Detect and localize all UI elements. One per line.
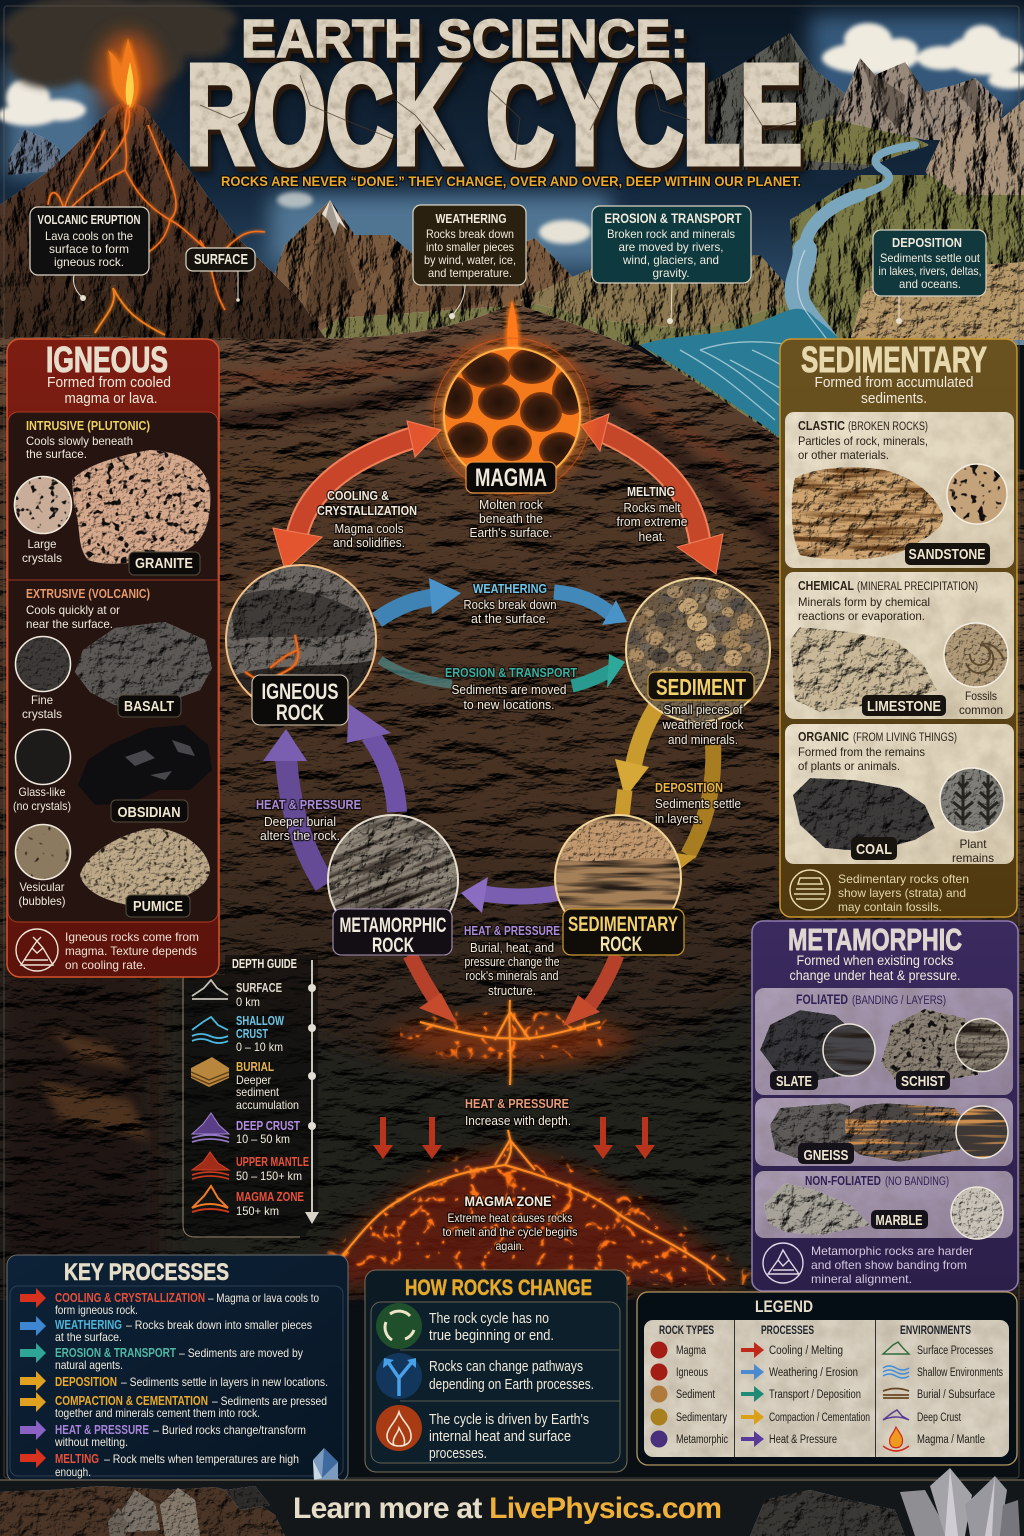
swatch: large crystals bbox=[14, 476, 72, 565]
footer band bbox=[0, 1468, 1024, 1536]
depth: shallow crust: CRUST bbox=[236, 1027, 268, 1041]
rock: sandstone: SANDSTONE bbox=[908, 546, 986, 563]
text: deposition: Sediments settle bbox=[655, 797, 741, 811]
process: heat and pressure: without melting. bbox=[54, 1435, 128, 1449]
process: compaction and cementation: together and minerals cement them into rock. bbox=[55, 1406, 260, 1420]
depth: surface: SURFACE bbox=[236, 981, 282, 995]
process: melting: – Rock melts when temperatures are high bbox=[104, 1452, 299, 1466]
depth: upper mantle: 50 – 150+ km bbox=[236, 1169, 302, 1183]
panel: key processes bbox=[7, 1255, 348, 1482]
swatch: fine crystals: Fine bbox=[31, 693, 53, 707]
callout: deposition: in lakes, rivers, deltas, bbox=[878, 264, 982, 278]
swatch: large crystals: Large bbox=[28, 537, 57, 551]
rock: limestone bbox=[790, 623, 1008, 717]
process: erosion and transport: EROSION & TRANSPORT bbox=[55, 1345, 176, 1360]
process: cooling and crystallization: – Magma or lava cools to bbox=[208, 1291, 319, 1305]
text: sediment description: weathered rock bbox=[662, 718, 744, 732]
card: clastic: CLASTIC bbox=[798, 418, 845, 433]
legend column: rock types: Sediment bbox=[676, 1389, 716, 1401]
process: melting bbox=[20, 1448, 299, 1479]
text: heat and pressure increase bbox=[465, 1096, 571, 1128]
depth: surface: 0 km bbox=[236, 995, 260, 1009]
text: magma zone: MAGMA ZONE bbox=[464, 1193, 552, 1209]
text: metamorphic definition: change under heat & pressure. bbox=[790, 968, 960, 983]
text: erosion and transport: Sediments are moved bbox=[452, 683, 567, 697]
node: sedimentary rock bbox=[548, 808, 690, 956]
depth: upper mantle bbox=[192, 1152, 309, 1183]
legend column: processes: Heat & Pressure bbox=[769, 1434, 837, 1446]
background art: river and sea bbox=[640, 145, 915, 455]
card: foliated: FOLIATED bbox=[796, 992, 848, 1007]
label: sediment: SEDIMENT bbox=[656, 674, 746, 700]
process: deposition: – Sediments settle in layers in new locations. bbox=[121, 1375, 328, 1389]
text: sedimentary definition: sediments. bbox=[861, 390, 927, 407]
rock: marble: MARBLE bbox=[876, 1212, 922, 1229]
callout: weathering: into smaller pieces bbox=[426, 240, 514, 254]
text: cooling and crystallization: COOLING & bbox=[327, 489, 389, 503]
rock: marble bbox=[764, 1183, 1003, 1239]
card: chemical: Minerals form by chemical bbox=[798, 595, 930, 609]
rock: obsidian bbox=[78, 725, 212, 822]
card: non-foliated: (NO BANDING) bbox=[885, 1176, 949, 1188]
callout: deposition: and oceans. bbox=[899, 277, 961, 291]
point: change pathways: Rocks can change pathways bbox=[429, 1358, 583, 1375]
depth: burial: sediment bbox=[236, 1085, 280, 1099]
legend column: processes: PROCESSES bbox=[761, 1325, 814, 1337]
legend column: environments: Surface Processes bbox=[917, 1345, 993, 1357]
process: erosion and transport: natural agents. bbox=[55, 1358, 123, 1372]
text: cooling and crystallization: Magma cools bbox=[334, 522, 404, 536]
text: igneous note: Igneous rocks come from bbox=[65, 930, 199, 944]
text: heat and pressure, metamorphic to igneous: Deeper burial bbox=[264, 815, 336, 829]
card: foliated: (BANDING / LAYERS) bbox=[852, 995, 946, 1007]
text: heat and pressure increase: Increase with depth. bbox=[465, 1114, 571, 1128]
node: metamorphic rock bbox=[327, 814, 459, 956]
label: sedimentary rock: SEDIMENTARY bbox=[568, 913, 678, 936]
text: heat and pressure, metamorphic to igneous: HEAT & PRESSURE bbox=[256, 798, 361, 812]
point: no beginning: The rock cycle has no bbox=[429, 1310, 549, 1327]
text: metamorphic definition bbox=[790, 953, 960, 983]
arrow: sedimentary to metamorphic bbox=[461, 877, 558, 913]
depth: magma zone bbox=[192, 1186, 304, 1218]
rock: slate bbox=[760, 1010, 875, 1090]
callout: deposition bbox=[873, 230, 986, 324]
process: cooling and crystallization: COOLING & CRYSTALLIZATION bbox=[55, 1290, 205, 1305]
text: igneous definition: magma or lava. bbox=[64, 390, 158, 407]
text: melting bbox=[616, 485, 688, 544]
callout: deposition: DEPOSITION bbox=[892, 235, 962, 250]
swatch: vesicular bbox=[15, 824, 71, 908]
text: igneous note: on cooling rate. bbox=[65, 958, 146, 972]
callout: weathering: by wind, water, ice, bbox=[424, 253, 516, 267]
legend column: processes: Cooling / Melting bbox=[769, 1345, 843, 1357]
background: sky bbox=[0, 0, 1024, 345]
rock: schist: SCHIST bbox=[901, 1073, 945, 1090]
label: sedimentary rock: ROCK bbox=[600, 933, 642, 956]
section: extrusive: near the surface. bbox=[26, 617, 113, 631]
text: magma description: Earth's surface. bbox=[470, 526, 552, 540]
callout: deposition: Sediments settle out bbox=[880, 251, 981, 265]
card: clastic: Particles of rock, minerals, bbox=[798, 434, 928, 448]
depth: magma zone: MAGMA ZONE bbox=[236, 1190, 304, 1204]
label: igneous rock: IGNEOUS bbox=[262, 679, 338, 704]
section: extrusive: EXTRUSIVE (VOLCANIC) bbox=[26, 587, 150, 601]
legend column: environments: Deep Crust bbox=[917, 1412, 962, 1424]
process: compaction and cementation: – Sediments are pressed bbox=[212, 1394, 327, 1408]
process: cooling and crystallization bbox=[20, 1288, 319, 1317]
text: igneous definition: Formed from cooled bbox=[47, 374, 171, 391]
heading: key processes: KEY PROCESSES bbox=[64, 1259, 229, 1286]
rock: coal bbox=[793, 768, 1004, 865]
panel: how rocks change bbox=[365, 1270, 627, 1472]
process: weathering: WEATHERING bbox=[55, 1317, 122, 1332]
card: chemical: reactions or evaporation. bbox=[798, 609, 925, 623]
card: non-foliated bbox=[755, 1171, 1013, 1239]
icon: blue crystal bbox=[308, 1448, 343, 1482]
text: metamorphic definition: Formed when existing rocks bbox=[796, 953, 954, 968]
text: weathering: at the surface. bbox=[471, 612, 549, 626]
depth: burial bbox=[191, 1057, 299, 1112]
card: gneiss bbox=[755, 1098, 1013, 1166]
depth: deep crust bbox=[192, 1113, 300, 1146]
point: heat driven: internal heat and surface bbox=[429, 1428, 571, 1445]
point: heat driven bbox=[376, 1405, 589, 1462]
legend column: processes: Weathering / Erosion bbox=[769, 1367, 858, 1379]
card: chemical: (MINERAL PRECIPITATION) bbox=[857, 581, 978, 593]
arrow: erosion and transport bbox=[380, 654, 625, 688]
text: metamorphic note: Metamorphic rocks are harder bbox=[811, 1244, 973, 1258]
callout: surface: SURFACE bbox=[194, 252, 248, 268]
legend column: rock types: ROCK TYPES bbox=[659, 1325, 714, 1337]
swatch: vesicular: (bubbles) bbox=[18, 894, 66, 908]
callout: erosion and transport: wind, glaciers, and bbox=[622, 253, 719, 267]
card: organic: ORGANIC bbox=[798, 729, 850, 744]
background art: left clouds and volcano bbox=[0, 0, 330, 345]
label: metamorphic rock: METAMORPHIC bbox=[340, 914, 446, 937]
section: intrusive: INTRUSIVE (PLUTONIC) bbox=[26, 419, 150, 433]
panel: metamorphic bbox=[752, 921, 1018, 1291]
heading: Earth Science: EARTH SCIENCE: bbox=[241, 9, 688, 69]
process: deposition: DEPOSITION bbox=[55, 1374, 117, 1389]
rock: pumice: PUMICE bbox=[133, 898, 183, 915]
text: magma zone: Extreme heat causes rocks bbox=[448, 1211, 572, 1225]
text: heat and pressure, sedimentary to metamorphic: structure. bbox=[488, 984, 536, 998]
rock: granite: GRANITE bbox=[135, 555, 193, 572]
swatch: vesicular: Vesicular bbox=[20, 880, 64, 894]
depth: burial: accumulation bbox=[236, 1098, 299, 1112]
text: metamorphic note: and often show banding from bbox=[811, 1258, 967, 1272]
rock: slate: SLATE bbox=[776, 1073, 812, 1090]
node: magma bbox=[424, 328, 600, 504]
depth: deep crust: DEEP CRUST bbox=[236, 1119, 300, 1133]
label: igneous rock: ROCK bbox=[276, 700, 324, 725]
depth: upper mantle: UPPER MANTLE bbox=[236, 1155, 309, 1169]
footer text: Learn more at LivePhysics.com bbox=[293, 1492, 722, 1525]
depth: deep crust: 10 – 50 km bbox=[236, 1132, 290, 1146]
text: melting: MELTING bbox=[627, 485, 675, 499]
callout: volcanic eruption bbox=[30, 207, 149, 301]
callout: weathering: WEATHERING bbox=[436, 211, 506, 226]
heading: legend: LEGEND bbox=[755, 1297, 813, 1316]
depth: burial: BURIAL bbox=[236, 1060, 274, 1074]
callout: volcanic eruption: igneous rock. bbox=[54, 255, 124, 269]
arrow: cooling and crystallization bbox=[273, 421, 441, 570]
callout: surface bbox=[186, 248, 255, 302]
text: metamorphic note bbox=[811, 1244, 973, 1286]
text: igneous note: magma. Texture depends bbox=[65, 944, 197, 958]
rock: pumice bbox=[80, 828, 210, 917]
text: melting: Rocks melt bbox=[624, 501, 681, 515]
card: chemical: CHEMICAL bbox=[798, 578, 854, 593]
text: magma zone: to melt and the cycle begins bbox=[442, 1225, 578, 1239]
section: intrusive: Cools slowly beneath bbox=[26, 434, 133, 448]
text: heat and pressure, metamorphic to igneous: alters the rock. bbox=[260, 829, 340, 843]
arrows: down into magma bbox=[410, 955, 617, 1026]
section: intrusive bbox=[14, 419, 210, 575]
depth: surface bbox=[192, 980, 282, 1009]
text: metamorphic note: mineral alignment. bbox=[811, 1272, 912, 1286]
legend column: processes: Transport / Deposition bbox=[769, 1389, 861, 1401]
panel: sedimentary bbox=[780, 339, 1017, 917]
rock: limestone: LIMESTONE bbox=[867, 698, 941, 715]
card: clastic bbox=[785, 412, 1014, 568]
point: heat driven: processes. bbox=[429, 1445, 487, 1462]
subtitle: ROCKS ARE NEVER “DONE.” THEY CHANGE, OVER AND OVER, DEEP WITHIN OUR PLANET. bbox=[221, 174, 801, 189]
text: sedimentary note: show layers (strata) and bbox=[838, 886, 966, 900]
arrow: weathering bbox=[377, 578, 627, 625]
label: magma: MAGMA bbox=[475, 464, 547, 492]
rock: granite bbox=[72, 450, 210, 575]
callout: weathering: Rocks break down bbox=[426, 227, 514, 241]
text: cooling and crystallization bbox=[317, 489, 417, 550]
process: melting: MELTING bbox=[55, 1451, 99, 1466]
point: change pathways: depending on Earth processes. bbox=[429, 1376, 594, 1393]
text: magma zone bbox=[442, 1193, 578, 1253]
legend column: environments: Burial / Subsurface bbox=[917, 1389, 995, 1401]
panel: depth guide bbox=[183, 955, 319, 1237]
section: intrusive: the surface. bbox=[26, 447, 87, 461]
card: clastic: (BROKEN ROCKS) bbox=[848, 421, 928, 433]
label: metamorphic rock: ROCK bbox=[372, 934, 414, 957]
rock: basalt: BASALT bbox=[124, 698, 174, 715]
callout: erosion and transport: Broken rock and minerals bbox=[607, 227, 735, 241]
text: sedimentary note: Sedimentary rocks often bbox=[838, 872, 969, 886]
arrow: sediment to sedimentary bbox=[615, 702, 660, 816]
legend column: environments: Magma / Mantle bbox=[917, 1434, 985, 1446]
rock: basalt bbox=[75, 622, 212, 717]
text: sediment description bbox=[662, 703, 744, 747]
callout: volcanic eruption: VOLCANIC ERUPTION bbox=[38, 213, 140, 227]
label: igneous rock bbox=[252, 675, 348, 725]
text: heat and pressure increase: HEAT & PRESSURE bbox=[465, 1096, 569, 1111]
legend column: rock types: Igneous bbox=[676, 1367, 708, 1379]
arrow: deposition bbox=[668, 745, 713, 870]
depth: burial: Deeper bbox=[236, 1073, 271, 1087]
process: compaction and cementation bbox=[20, 1392, 327, 1420]
text: heat and pressure, sedimentary to metamorphic: HEAT & PRESSURE bbox=[464, 924, 560, 938]
node: igneous rock bbox=[217, 556, 385, 725]
process: compaction and cementation: COMPACTION & CEMENTATION bbox=[55, 1393, 208, 1408]
swatch: glass-like: (no crystals) bbox=[13, 799, 71, 813]
card: non-foliated: NON-FOLIATED bbox=[805, 1173, 881, 1188]
footer rocks: left bbox=[0, 1486, 285, 1536]
text: erosion and transport bbox=[445, 665, 577, 712]
rock: coal: Plant bbox=[960, 837, 987, 851]
background art: right mountains and clouds bbox=[680, 15, 1024, 340]
card: chemical bbox=[785, 572, 1014, 719]
text: heat and pressure, sedimentary to metamorphic bbox=[464, 924, 560, 998]
icon: volcano badge bbox=[16, 929, 58, 971]
text: magma description: beneath the bbox=[479, 512, 543, 526]
process: deposition bbox=[20, 1371, 328, 1391]
depth: shallow crust: SHALLOW bbox=[236, 1014, 284, 1028]
text: sedimentary note: may contain fossils. bbox=[838, 900, 942, 914]
point: change pathways bbox=[376, 1353, 594, 1399]
rock: coal: remains bbox=[952, 851, 994, 865]
text: igneous definition bbox=[47, 374, 171, 407]
callout: erosion and transport: gravity. bbox=[652, 266, 690, 280]
legend column: processes: Compaction / Cementation bbox=[769, 1412, 870, 1424]
rock: limestone: common bbox=[959, 703, 1003, 717]
text: melting: heat. bbox=[638, 530, 666, 544]
process: cooling and crystallization: form igneous rock. bbox=[55, 1303, 138, 1317]
swatch: large crystals: crystals bbox=[22, 551, 62, 565]
text: cooling and crystallization: and solidifies. bbox=[333, 536, 405, 550]
timeline bbox=[305, 960, 319, 1224]
legend column: processes bbox=[741, 1325, 870, 1447]
heading: how rocks change: HOW ROCKS CHANGE bbox=[405, 1275, 592, 1300]
legend column: rock types: Metamorphic bbox=[676, 1434, 728, 1446]
arrow: melting bbox=[581, 414, 723, 574]
label: sedimentary rock bbox=[563, 909, 684, 956]
rock: gneiss bbox=[770, 1103, 1008, 1164]
text: heat and pressure, sedimentary to metamorphic: pressure change the bbox=[464, 955, 560, 969]
card: foliated bbox=[755, 988, 1013, 1095]
card: organic bbox=[785, 724, 1014, 865]
rock: limestone: Fossils bbox=[965, 689, 997, 703]
process: weathering: at the surface. bbox=[55, 1330, 122, 1344]
callout: volcanic eruption: Lava cools on the bbox=[45, 229, 133, 243]
arrow: metamorphic to igneous bbox=[263, 704, 397, 885]
callout: erosion and transport bbox=[592, 206, 751, 324]
process: heat and pressure: HEAT & PRESSURE bbox=[55, 1422, 149, 1437]
process: melting: enough. bbox=[55, 1465, 91, 1479]
text: cooling and crystallization: CRYSTALLIZATION bbox=[317, 504, 417, 518]
text: weathering bbox=[464, 581, 557, 626]
background art: centre mountains and clouds bbox=[250, 192, 860, 460]
text: sedimentary definition: Formed from accumulated bbox=[814, 374, 974, 391]
swatch: fine crystals: crystals bbox=[22, 707, 62, 721]
callout: erosion and transport: are moved by rivers, bbox=[618, 240, 724, 254]
text: heat and pressure, sedimentary to metamorphic: rock's minerals and bbox=[466, 969, 559, 983]
depth: shallow crust: 0 – 10 km bbox=[236, 1040, 283, 1054]
panel: legend bbox=[637, 1292, 1017, 1465]
text: sediment description: Small pieces of bbox=[664, 703, 743, 717]
text: sedimentary definition bbox=[814, 374, 974, 407]
process: heat and pressure bbox=[20, 1420, 306, 1449]
process: erosion and transport bbox=[20, 1343, 303, 1372]
background: lava vents and magma zone bbox=[300, 300, 760, 1285]
callout: weathering bbox=[413, 205, 526, 319]
point: no beginning: true beginning or end. bbox=[429, 1327, 554, 1344]
legend column: rock types bbox=[650, 1325, 728, 1448]
rock: obsidian: OBSIDIAN bbox=[118, 804, 180, 821]
arrows: increasing depth bbox=[373, 1117, 655, 1159]
process: erosion and transport: – Sediments are moved by bbox=[179, 1346, 303, 1360]
rock: sandstone bbox=[792, 464, 1007, 565]
text: erosion and transport: to new locations. bbox=[464, 698, 554, 712]
text: magma description bbox=[470, 498, 552, 540]
section: extrusive: Cools quickly at or bbox=[26, 603, 120, 617]
label: metamorphic rock bbox=[333, 909, 452, 957]
text: melting: from extreme bbox=[616, 515, 688, 529]
rock: gneiss: GNEISS bbox=[804, 1147, 848, 1164]
heading: igneous: IGNEOUS bbox=[46, 339, 168, 380]
node: sediment bbox=[622, 574, 774, 723]
process: weathering: – Rocks break down into smaller pieces bbox=[126, 1318, 312, 1332]
panel: igneous bbox=[7, 339, 219, 977]
rock: schist bbox=[881, 1009, 1009, 1090]
text: weathering: WEATHERING bbox=[473, 581, 547, 596]
background: underground rock layers bbox=[0, 303, 1024, 1300]
swatch: fine crystals bbox=[15, 636, 71, 721]
point: no beginning bbox=[376, 1303, 554, 1349]
text: heat and pressure, metamorphic to igneous bbox=[256, 798, 361, 843]
callout: volcanic eruption: surface to form bbox=[49, 242, 129, 256]
footer rocks: right crystals bbox=[750, 1468, 1020, 1536]
text: deposition: DEPOSITION bbox=[655, 781, 723, 795]
text: magma zone: again. bbox=[496, 1239, 524, 1253]
card: clastic: or other materials. bbox=[798, 448, 889, 462]
text: sediment description: and minerals. bbox=[668, 733, 738, 747]
legend column: rock types: Magma bbox=[676, 1345, 706, 1357]
depth: shallow crust bbox=[192, 1014, 284, 1054]
legend column: rock types: Sedimentary bbox=[676, 1412, 727, 1424]
arrows: cycle between rock types bbox=[263, 414, 723, 1026]
text: weathering: Rocks break down bbox=[464, 598, 557, 612]
label: magma bbox=[466, 462, 556, 493]
text: igneous note bbox=[65, 930, 199, 972]
text: magma description: Molten rock bbox=[479, 498, 544, 512]
swatch: glass-like: Glass-like bbox=[18, 785, 66, 799]
callout: weathering: and temperature. bbox=[428, 266, 512, 280]
text: heat and pressure, sedimentary to metamorphic: Burial, heat, and bbox=[470, 941, 554, 955]
swatch: glass-like bbox=[13, 730, 71, 813]
card: organic: of plants or animals. bbox=[798, 759, 900, 773]
process: weathering bbox=[20, 1316, 312, 1344]
legend column: environments bbox=[883, 1325, 1003, 1451]
text: deposition: in layers. bbox=[655, 812, 702, 826]
rock: coal: COAL bbox=[856, 841, 892, 858]
depth: magma zone: 150+ km bbox=[236, 1204, 279, 1218]
card: organic: (FROM LIVING THINGS) bbox=[853, 732, 957, 744]
text: sedimentary note bbox=[838, 872, 969, 914]
process: heat and pressure: – Buried rocks change/transform bbox=[153, 1423, 306, 1437]
legend column: environments: ENVIRONMENTS bbox=[900, 1325, 971, 1337]
heading: metamorphic: METAMORPHIC bbox=[788, 922, 962, 957]
callout: erosion and transport: EROSION & TRANSPORT bbox=[604, 211, 742, 226]
point: heat driven: The cycle is driven by Earth's bbox=[429, 1411, 589, 1428]
section: extrusive bbox=[13, 587, 212, 917]
icon: strata badge bbox=[790, 870, 830, 910]
text: deposition bbox=[655, 781, 741, 826]
icon: mountain badge bbox=[763, 1243, 803, 1283]
card: organic: Formed from the remains bbox=[798, 745, 925, 759]
text: erosion and transport: EROSION & TRANSPORT bbox=[445, 665, 577, 680]
heading: depth guide: DEPTH GUIDE bbox=[232, 957, 297, 971]
